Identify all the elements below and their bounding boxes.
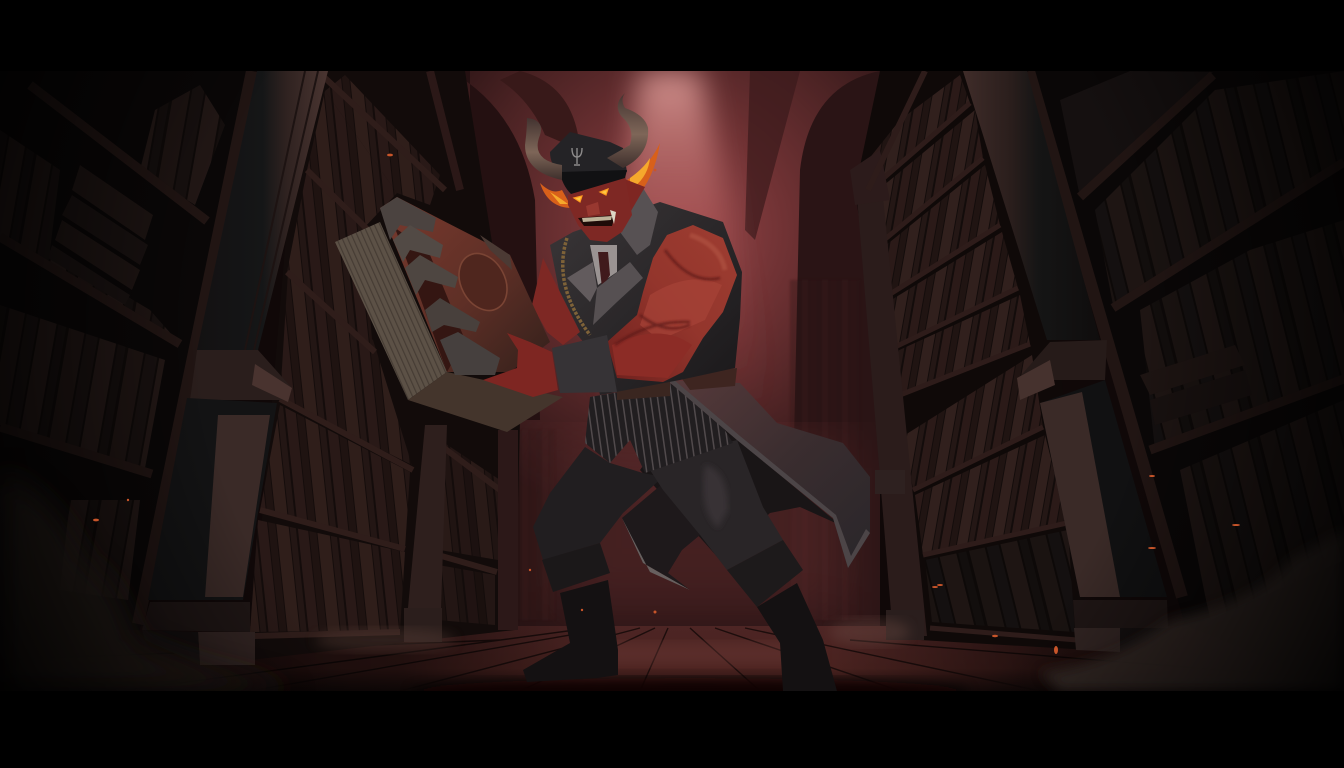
leather cover bbox=[380, 197, 550, 372]
vest torso bbox=[550, 188, 742, 395]
head bbox=[525, 93, 660, 242]
right stone pillar bbox=[963, 71, 1168, 652]
cap badge bbox=[572, 148, 582, 165]
embers bbox=[93, 154, 1240, 654]
right inner bookcase bbox=[850, 71, 1090, 650]
face bbox=[568, 175, 632, 242]
hand bbox=[483, 333, 558, 397]
right horn bbox=[607, 93, 648, 168]
cap bbox=[550, 132, 627, 173]
left inner bookcase bbox=[250, 71, 520, 660]
ear bbox=[626, 180, 645, 210]
demon figure bbox=[335, 93, 870, 691]
left horn bbox=[525, 118, 562, 180]
right outer bookcase bbox=[1027, 71, 1305, 600]
small pillar bbox=[408, 425, 447, 608]
cuff bbox=[552, 335, 617, 393]
rear coat lining bbox=[622, 428, 834, 590]
left outer bookcase bbox=[0, 71, 255, 630]
belt bbox=[617, 368, 737, 400]
giant book bbox=[335, 197, 563, 432]
floor bbox=[268, 626, 1106, 686]
far arm bbox=[532, 258, 580, 345]
metal spine bands bbox=[380, 197, 512, 375]
boots bbox=[523, 580, 837, 691]
embossed emblem bbox=[458, 252, 508, 312]
near arm bbox=[607, 225, 737, 382]
left stone pillar bbox=[142, 71, 328, 665]
legs bbox=[533, 440, 803, 607]
flames bbox=[540, 143, 660, 208]
page block bbox=[335, 222, 447, 400]
far corridor with glow bbox=[147, 71, 1182, 626]
front coat panel bbox=[667, 379, 870, 568]
striped waistcoat bbox=[585, 383, 733, 473]
